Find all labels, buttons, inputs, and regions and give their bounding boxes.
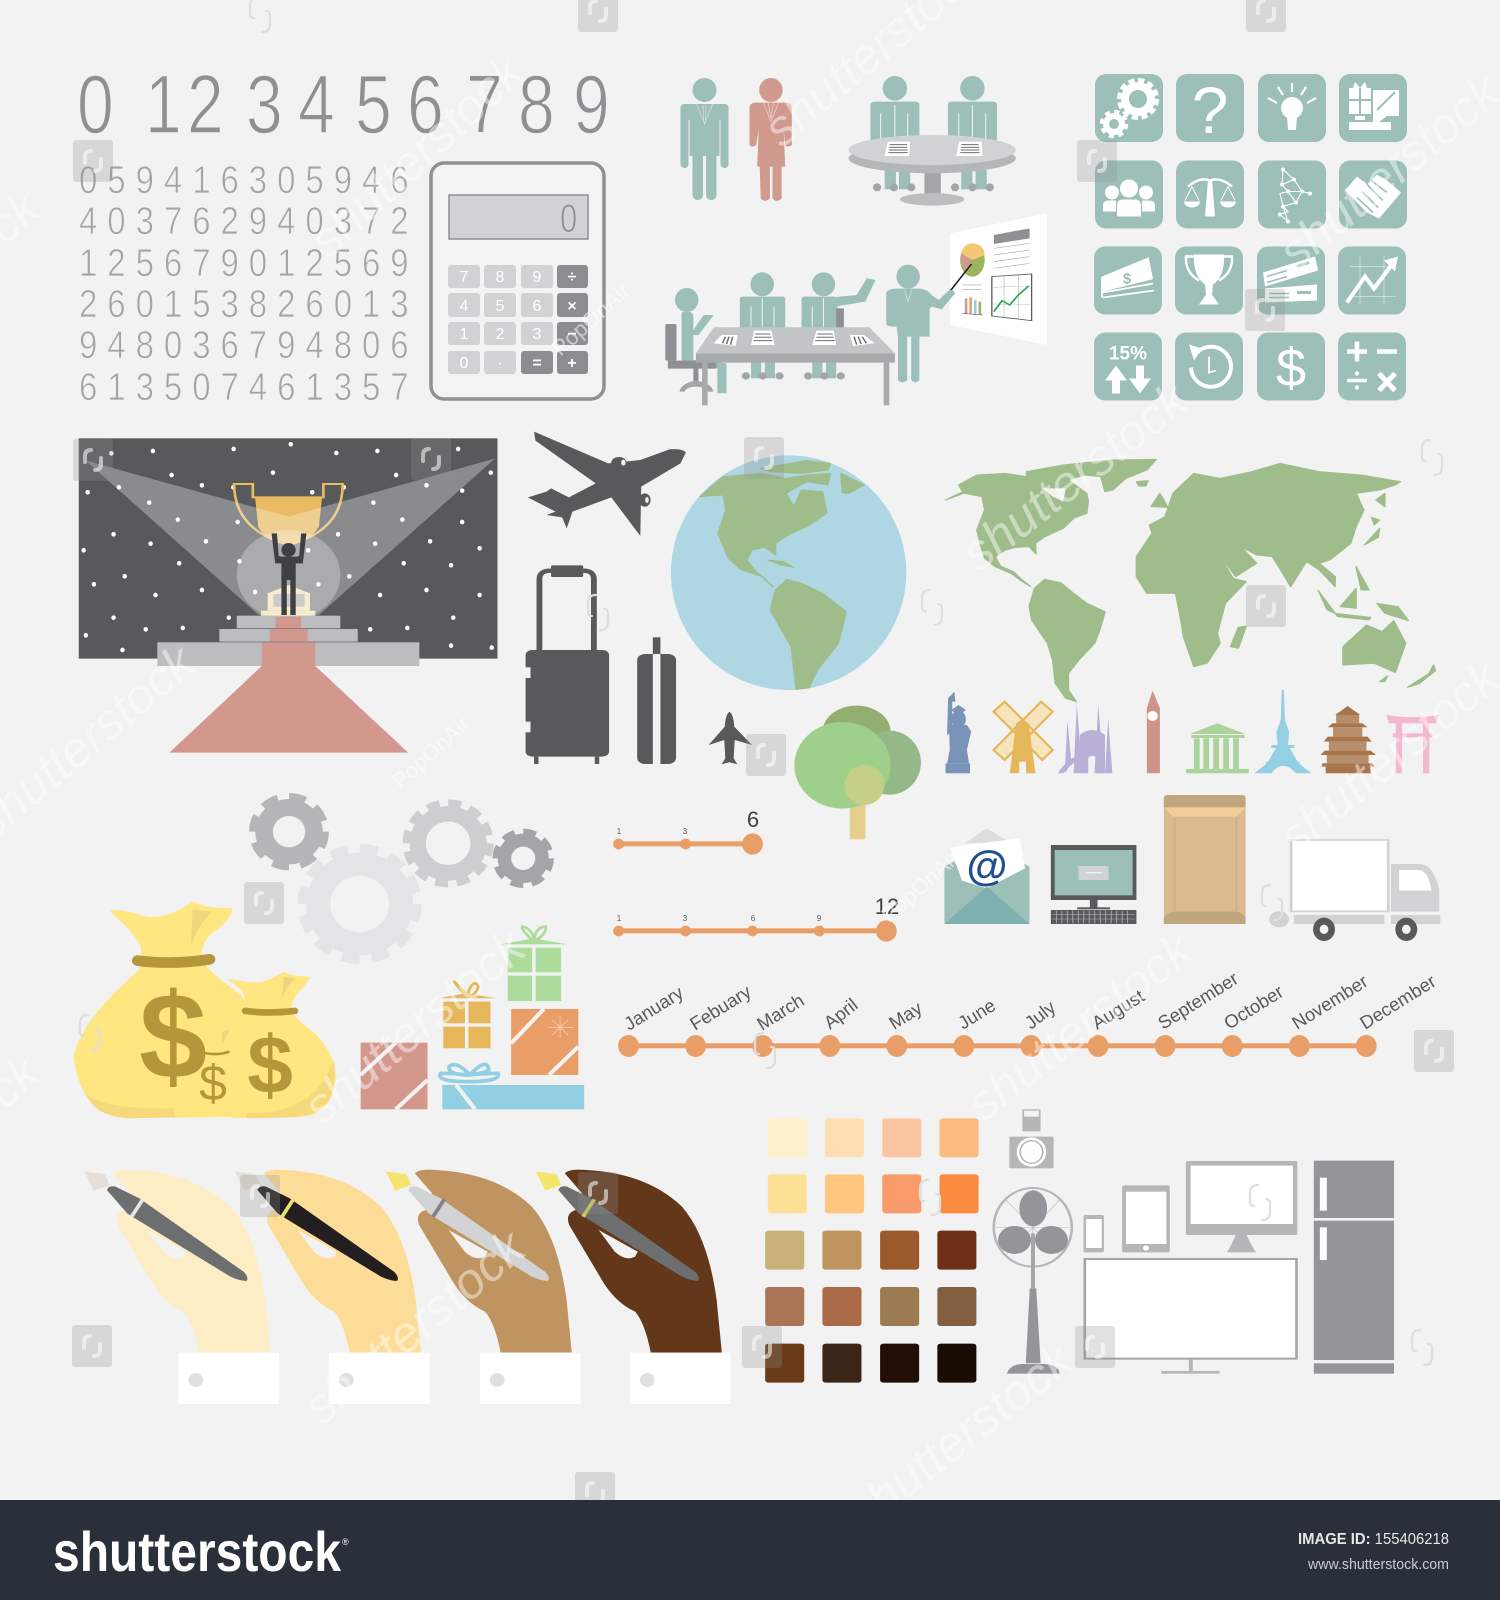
landmark: pagoda [1320, 706, 1376, 773]
slider scale 12: 3 [683, 914, 688, 923]
camera [1009, 1109, 1054, 1168]
money bags: $ [247, 1020, 293, 1111]
hands holding pens [84, 1170, 731, 1404]
seated people at table [740, 272, 876, 378]
delivery truck [1269, 840, 1440, 941]
slider scale 6 [613, 807, 763, 855]
globe [671, 455, 906, 692]
slider scale 6: 6 [747, 807, 759, 832]
hand 3 [386, 1170, 580, 1404]
tablet [1122, 1185, 1170, 1252]
icon: question mark [1176, 73, 1244, 147]
landmark: parthenon [1186, 723, 1249, 773]
winner stage scene [79, 438, 497, 753]
suitcase [524, 565, 609, 764]
calculator: 8 [496, 269, 505, 286]
email envelope: @ [967, 842, 1007, 889]
month timeline: April [820, 994, 862, 1033]
gift boxes [361, 927, 584, 1109]
hand 2 [235, 1170, 430, 1404]
watermark author marks: PopOnAir [876, 845, 964, 928]
stars [81, 442, 494, 652]
calculator: 0 [460, 355, 469, 372]
month timeline: October [1220, 981, 1287, 1033]
watermark wordmarks: shutterstock [299, 41, 536, 268]
month timeline: December [1356, 970, 1439, 1033]
calculator: 5 [496, 298, 505, 315]
desktop monitor [1186, 1161, 1297, 1252]
icon: banknotes: $ [1123, 270, 1132, 288]
calculator: × [567, 298, 577, 315]
image id: IMAGE ID: 155406218 [1298, 1531, 1449, 1548]
month timeline: September [1154, 968, 1242, 1033]
icon: math operators [1338, 332, 1406, 400]
watermark wordmarks: shutterstock [293, 1217, 538, 1435]
gift: green [500, 927, 568, 1001]
landmark: statue of liberty [945, 692, 971, 773]
calculator: ÷ [568, 269, 577, 286]
meeting table [696, 327, 895, 405]
world map [945, 459, 1436, 702]
calculator: + [567, 355, 577, 372]
calculator: 3 [533, 326, 542, 343]
large seven-segment digits: 0123456789 [77, 57, 610, 151]
calculator: · [497, 355, 503, 372]
watermark wordmarks: shutterstock [836, 1330, 1085, 1542]
skin colour swatches [765, 1118, 979, 1383]
man figure [680, 78, 728, 200]
landmarks [945, 690, 1439, 773]
calculator: − [567, 326, 577, 343]
month timeline: January [620, 981, 688, 1034]
month timeline: November [1288, 970, 1371, 1033]
month timeline: May [885, 997, 926, 1033]
icon: handshake [1339, 160, 1407, 228]
calculator: 7 [460, 269, 469, 286]
money bags [74, 902, 336, 1118]
small digit grid: 948036794806 [79, 323, 409, 367]
slider scale 12 [613, 894, 899, 942]
watermark wordmarks: shutterstock [293, 917, 538, 1135]
icon: line chart [1338, 246, 1406, 314]
landmark: eiffel tower [1254, 690, 1312, 773]
small digit grid: 125679012569 [79, 241, 409, 285]
month timeline: Febuary [686, 980, 755, 1034]
month timeline: August [1088, 985, 1148, 1033]
brown envelope [1164, 795, 1246, 924]
gear: upper left [255, 799, 323, 864]
gift: red [361, 1043, 427, 1109]
landmark: cathedral [1058, 705, 1112, 773]
small digit grid: 260153826013 [79, 282, 409, 326]
television [1085, 1259, 1296, 1374]
slim suitcase [637, 637, 676, 764]
podium steps [157, 616, 419, 666]
calculator: 9 [533, 269, 542, 286]
slider scale 12: 1 [617, 914, 622, 923]
hand 4 [536, 1170, 731, 1404]
icon: question mark: ? [1192, 73, 1228, 147]
spotlights [86, 461, 289, 617]
gear: small dark [498, 834, 549, 883]
money bags: $ [139, 968, 207, 1104]
slider scale 12: 9 [817, 914, 822, 923]
desktop computer [1051, 845, 1136, 924]
icon: scales [1176, 160, 1244, 228]
footer logo: ® [342, 1537, 349, 1547]
slider scale 12: 12 [875, 894, 899, 919]
gear: medium [410, 806, 487, 881]
landmark: torii gate [1386, 715, 1439, 773]
landmark: windmill [994, 702, 1053, 773]
icon: gifts [1339, 74, 1407, 142]
icon: percent arrows: 15% [1109, 344, 1147, 364]
watermark wordmarks: shutterstock [956, 920, 1205, 1132]
phone [1084, 1215, 1104, 1252]
hand 1 [84, 1170, 279, 1404]
watermark author marks [387, 278, 964, 928]
refrigerator [1314, 1161, 1394, 1374]
icon: network map [1258, 160, 1326, 228]
trophy outline [234, 484, 343, 616]
icon: dollar: $ [1276, 338, 1306, 398]
presentation scene [665, 213, 1047, 405]
calculator: 2 [496, 326, 505, 343]
watermark author marks: PopOnAir [547, 278, 635, 361]
calculator [431, 163, 604, 399]
calculator: 1 [460, 326, 469, 343]
calculator: 4 [460, 298, 469, 315]
small digit grid: 613507461357 [79, 365, 409, 409]
presenter [886, 265, 955, 382]
icon: percent arrows [1094, 332, 1162, 400]
standing fan [994, 1188, 1072, 1374]
gear: large pale [306, 852, 413, 956]
tree [794, 706, 921, 839]
month timeline: March [753, 989, 808, 1034]
gift: blue [440, 1064, 584, 1109]
round table meeting [848, 76, 1016, 206]
small digit grid: 403762940372 [79, 199, 409, 243]
landmark: big ben [1147, 691, 1160, 773]
icon: clock [1175, 332, 1243, 400]
small airplane [709, 712, 752, 764]
gift: orange [511, 1009, 578, 1075]
slider scale 6: 1 [617, 827, 622, 836]
calculator: 6 [533, 298, 542, 315]
gears [255, 799, 549, 956]
icon: gears [1095, 74, 1163, 142]
watermark wordmarks: shutterstock [951, 370, 1200, 582]
footer bar [0, 1500, 1500, 1600]
footer logo: shutterstock [53, 1520, 342, 1583]
gift: gold [437, 982, 496, 1048]
icon: banknotes [1094, 246, 1162, 314]
watermark author marks: PopOnAir [387, 711, 475, 794]
icon grid [1094, 73, 1407, 400]
winner figure [272, 533, 306, 615]
presentation board [950, 213, 1047, 345]
small digit grid: 059416305946 [79, 158, 409, 202]
icon: tickets [1257, 246, 1325, 314]
icon: team [1095, 160, 1163, 228]
month timeline [618, 968, 1439, 1057]
slider scale 6: 3 [683, 827, 688, 836]
money bags: $ [199, 1055, 227, 1111]
icon: dollar [1257, 332, 1325, 400]
calculator: 0 [560, 195, 577, 241]
month timeline: July [1021, 996, 1060, 1033]
small digit grid [79, 158, 409, 409]
email envelope [944, 828, 1029, 924]
icon: light bulb [1258, 74, 1326, 142]
website: www.shutterstock.com [1307, 1556, 1449, 1573]
seated side person with chair [665, 288, 727, 393]
month timeline: June [954, 994, 999, 1033]
calculator: = [532, 355, 542, 372]
icon: trophy [1175, 246, 1243, 314]
red carpet [169, 617, 408, 753]
airplane [528, 432, 686, 536]
slider scale 12: 6 [751, 914, 756, 923]
woman figure [749, 78, 792, 201]
